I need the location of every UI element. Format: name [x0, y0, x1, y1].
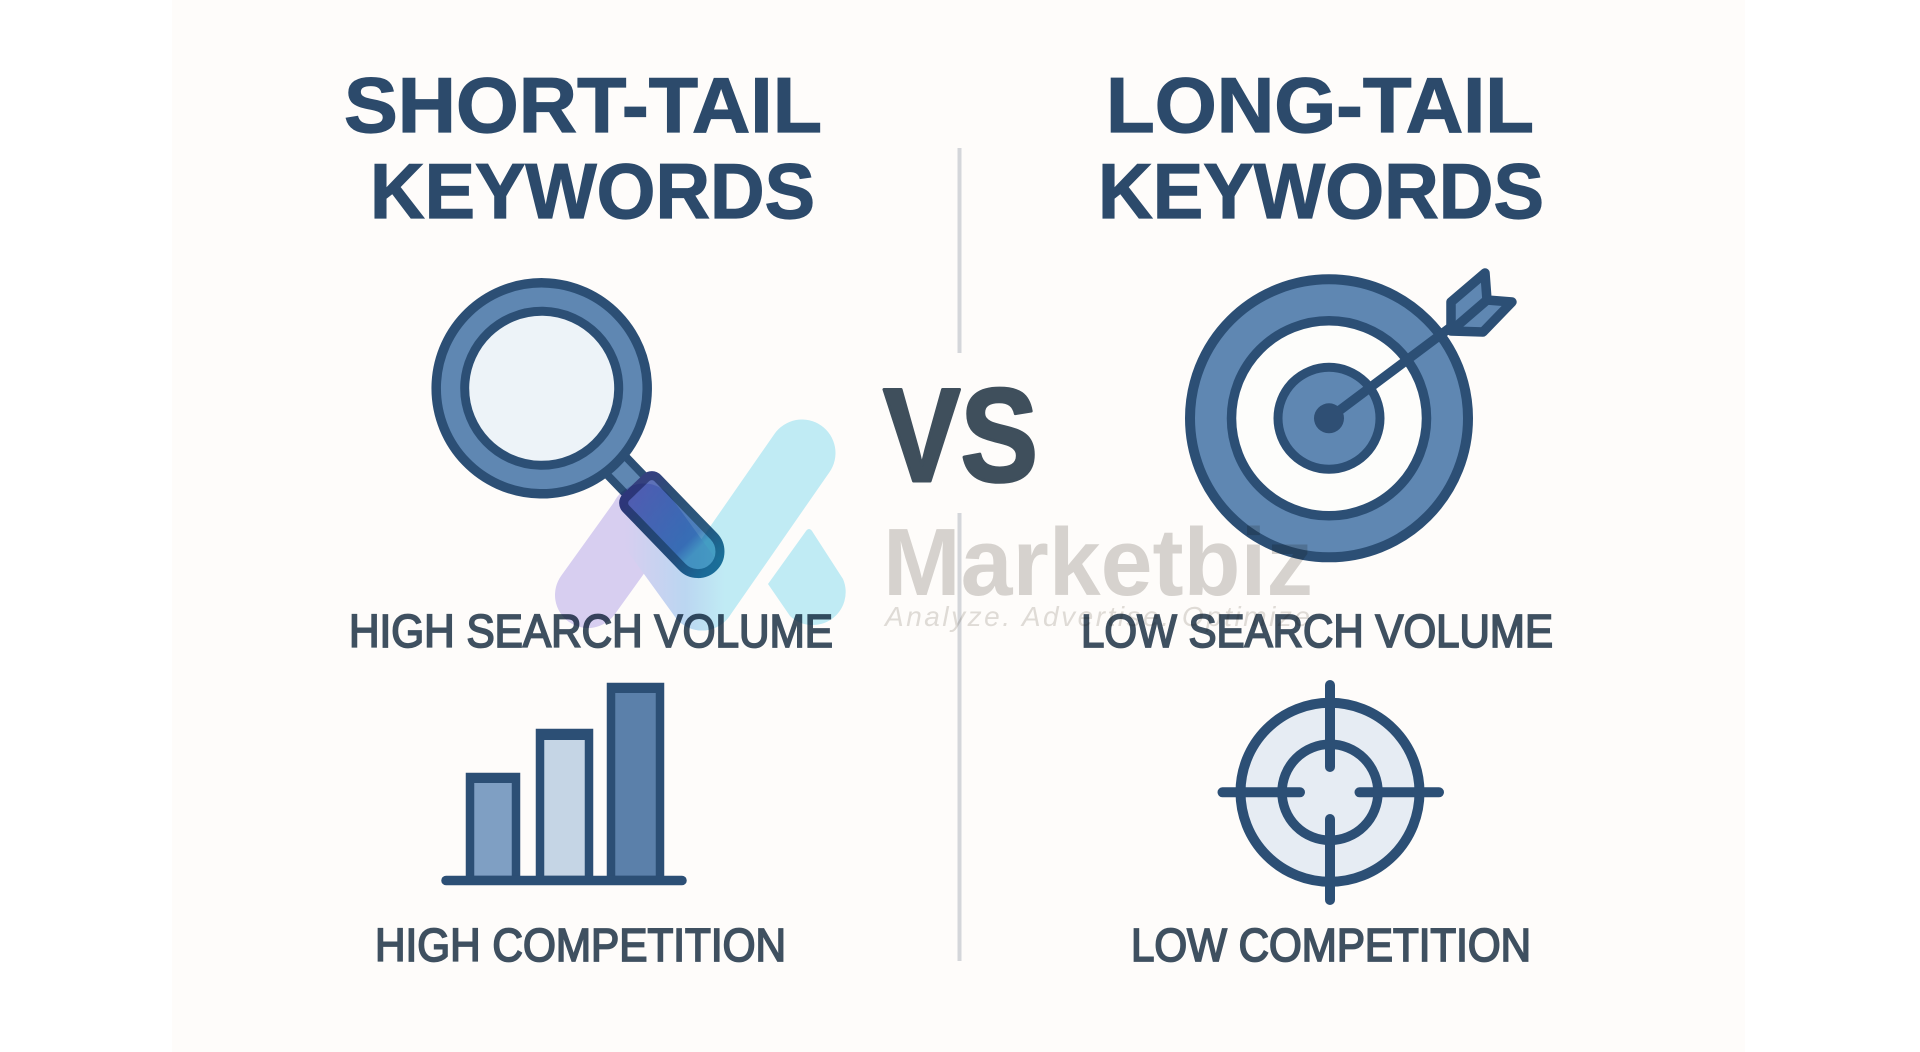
- watermark wordmark: Marketbiz: [883, 509, 1313, 616]
- VS label: VS: [883, 362, 1038, 510]
- handle neck: [602, 451, 648, 498]
- heading: short-tail keywords: KEYWORDS: [370, 147, 815, 235]
- icon: bar chart: [446, 683, 682, 880]
- center divider: [958, 148, 962, 961]
- handle grip: [620, 472, 729, 583]
- heading: long-tail keywords: [1098, 61, 1544, 235]
- watermark: Marketbiz logo and wordmark: [588, 453, 1313, 632]
- watermark tagline: Analyze. Advertise. Optimize: [883, 601, 1310, 632]
- label: high competition: HIGH COMPETITION: [375, 919, 786, 971]
- label: low competition: LOW COMPETITION: [1131, 919, 1531, 971]
- icon: crosshair: [1222, 685, 1439, 900]
- bar 3: [611, 687, 660, 880]
- target rings: [1190, 279, 1468, 557]
- label: low search volume: LOW SEARCH VOLUME: [1081, 605, 1553, 657]
- bullseye: [1314, 403, 1344, 433]
- arrow fletching: [1451, 273, 1512, 332]
- heading: short-tail keywords: SHORT-TAIL: [344, 61, 822, 149]
- heading: short-tail keywords: [344, 61, 822, 235]
- heading: long-tail keywords: KEYWORDS: [1098, 147, 1544, 235]
- lens ring: [393, 239, 691, 537]
- arrow shaft: [1329, 300, 1487, 418]
- baseline: [446, 876, 682, 885]
- lens glass: [433, 279, 651, 497]
- heading: long-tail keywords: LONG-TAIL: [1106, 61, 1534, 149]
- icon: target with arrow: [1190, 273, 1512, 557]
- icon: magnifying glass: [393, 239, 790, 640]
- watermark logo: [588, 453, 846, 625]
- bar 1: [470, 777, 516, 880]
- label: high search volume: HIGH SEARCH VOLUME: [349, 605, 833, 657]
- bar 2: [540, 733, 589, 880]
